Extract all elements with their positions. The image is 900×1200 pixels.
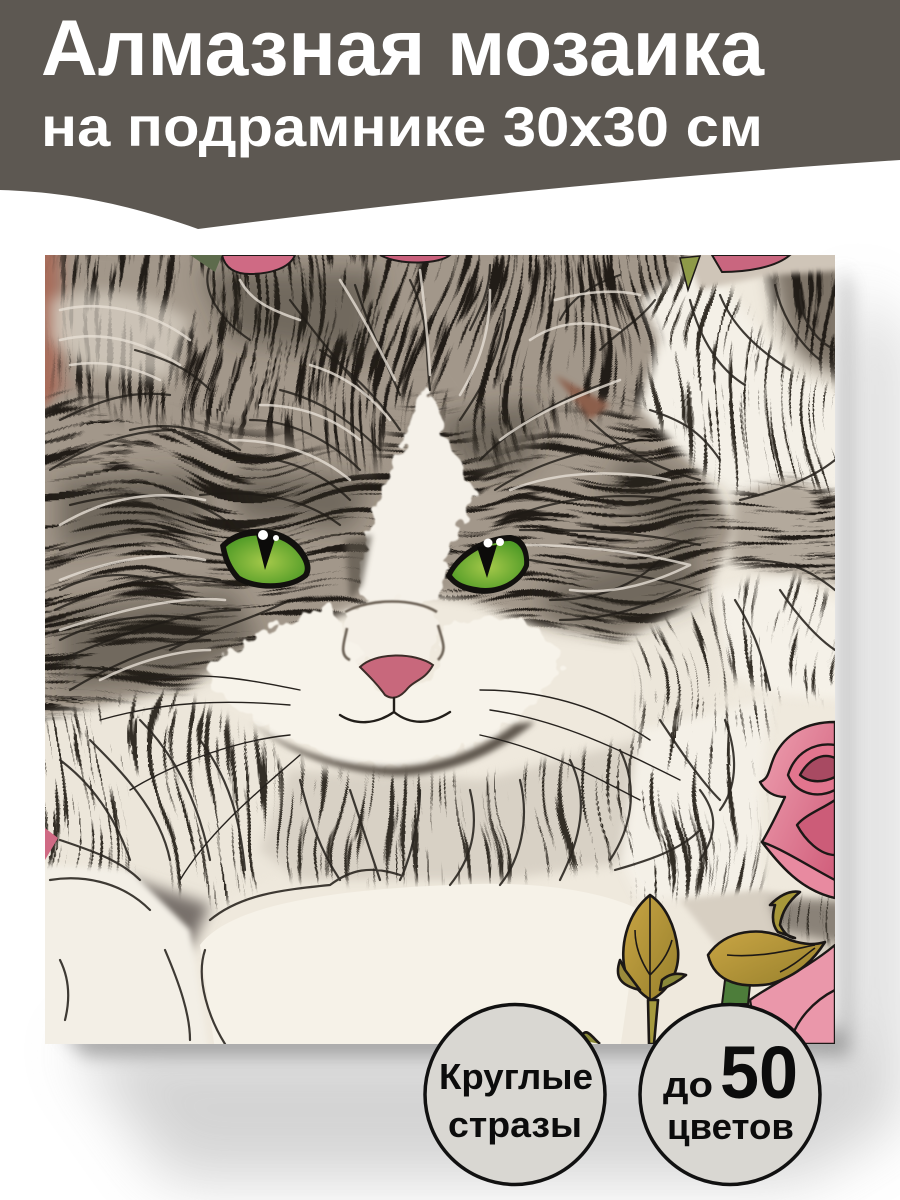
- left eye: [220, 529, 310, 589]
- lower rose: [750, 945, 835, 1044]
- badge: round rhinestones: стразы: [448, 1104, 582, 1145]
- canvas painting: cat with roses: [20, 240, 850, 1060]
- light fur strands on head: [60, 270, 690, 680]
- top roses: [45, 255, 790, 860]
- dark fur strands on head: [50, 265, 700, 690]
- badge: up to 50 colours: цветов: [667, 1106, 794, 1147]
- header banner: [0, 0, 900, 229]
- pink rose: [760, 722, 835, 898]
- shaded fur accents: [60, 270, 720, 690]
- rose stem: [722, 980, 750, 1004]
- canvas drop shadow: [60, 268, 900, 1180]
- subtitle: на подрамнике 30х30 см: [41, 95, 763, 158]
- bridge shading: [345, 535, 372, 600]
- whiskers: [100, 676, 680, 880]
- badge: up to 50 colours: [640, 1004, 820, 1184]
- badge: round rhinestones: Круглые: [439, 1056, 593, 1097]
- gold leaf: centre: [580, 895, 686, 1044]
- gold leaf: right: [708, 892, 825, 985]
- right side and body fur strands: [50, 285, 835, 1044]
- tonal fur masses: [20, 240, 850, 1060]
- badge: round rhinestones: [425, 1004, 605, 1184]
- nose and mouth: [340, 602, 450, 722]
- white blaze and muzzle: [205, 388, 561, 767]
- right eye: [446, 535, 529, 594]
- title: Алмазная мозаика: [41, 3, 765, 92]
- badge: up to 50 colours: до: [663, 1064, 713, 1105]
- chin shading: [250, 722, 535, 776]
- badge: up to 50 colours: 50: [720, 1031, 798, 1114]
